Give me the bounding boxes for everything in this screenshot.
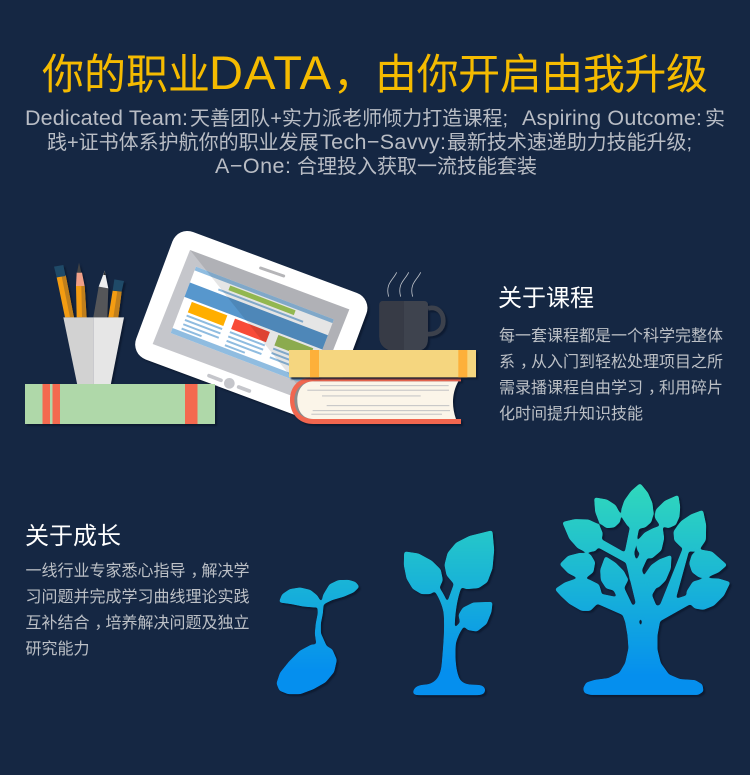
illustration: green book <box>25 384 215 424</box>
intro paragraph: 最新技术速递助力技能升级; <box>447 131 692 154</box>
icon: tree <box>556 484 729 694</box>
text: about growth <box>26 562 250 658</box>
intro paragraph: A−One: <box>215 154 291 178</box>
illustration: coffee cup <box>379 272 443 351</box>
intro paragraph: Aspiring Outcome: <box>522 106 702 130</box>
intro paragraph: 天善团队+实力派老师倾力打造课程; <box>190 107 508 130</box>
text: about growth: 互补结合 ，培养解决问题及独立 <box>26 614 250 632</box>
illustration: stacked books <box>289 350 476 424</box>
text: about courses: 化时间提升知识技能 <box>499 405 643 423</box>
intro paragraph: 合理投入获取一流技能套装 <box>297 155 537 178</box>
heading: about courses: 关于课程 <box>498 285 594 312</box>
icon: sprout <box>277 581 358 693</box>
intro paragraph: Tech−Savvy: <box>320 130 446 154</box>
intro paragraph: Dedicated Team: <box>25 106 188 130</box>
text: about growth: 习问题并完成学习曲线理论实践 <box>26 588 250 606</box>
illustration: pencil cup <box>54 263 124 385</box>
text: about courses <box>499 327 723 423</box>
illustration: tablet <box>131 226 372 426</box>
intro paragraph: 实 <box>705 107 725 130</box>
heading: about growth: 关于成长 <box>25 523 121 550</box>
title: 你的职业 <box>42 51 210 98</box>
text: about growth: 一线行业专家悉心指导 ，解决学 <box>26 562 250 580</box>
title: ， <box>333 51 375 98</box>
text: about growth: 研究能力 <box>26 640 90 658</box>
title: DATA <box>209 46 332 99</box>
intro paragraph <box>25 106 725 178</box>
intro paragraph: 践+证书体系护航你的职业发展 <box>47 131 319 154</box>
text: about courses: 每一套课程都是一个科学完整体 <box>499 327 723 345</box>
text: about courses: 系 ，从入门到轻松处理项目之所 <box>499 353 723 371</box>
icon: young plant <box>405 531 493 694</box>
text: about courses: 需录播课程自由学习 ，利用碎片 <box>499 379 723 397</box>
title: 由你开启由我升级 <box>375 51 708 98</box>
